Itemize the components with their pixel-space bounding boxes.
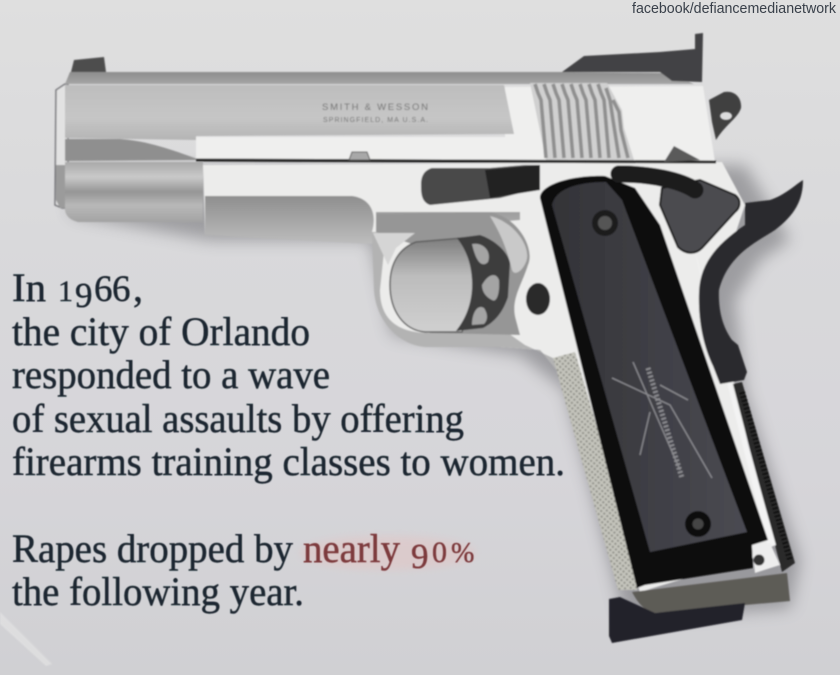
slide stop pin (485, 165, 540, 198)
slide serrations (535, 84, 628, 158)
line: the following year.: the following year. (12, 569, 304, 614)
grip screw upper (592, 210, 618, 236)
trigger guard web (373, 233, 415, 265)
barrel bushing (65, 139, 200, 161)
slide stop (421, 165, 540, 205)
slide top edge (65, 72, 694, 84)
thumb safety lever (619, 174, 695, 190)
pistol drop shadow (70, 165, 800, 620)
line: In 1966,: 6 (94, 269, 112, 310)
line: of sexual assaults by offering: of sexual assaults by offering (12, 396, 464, 441)
grip engraved lettering (648, 368, 682, 478)
background light streak (0, 612, 52, 666)
magazine well lip (632, 573, 790, 613)
line: In 1966,: , (133, 265, 143, 310)
line: Rapes dropped by nearly 90% (12, 526, 474, 576)
front strap stippling (553, 352, 640, 590)
Rapes dropped by: Rapes dropped by (12, 526, 293, 571)
line: responded to a wave: responded to a wave (12, 352, 330, 397)
trigger (456, 235, 510, 331)
nearly 90% highlight: 9 (411, 537, 428, 576)
line: In 1966,: In (12, 265, 46, 310)
trigger guard (372, 232, 558, 372)
muzzle (55, 84, 68, 208)
slide rail line (196, 160, 716, 162)
muzzle dark ring (56, 165, 66, 208)
grip screw upper ring (598, 216, 612, 230)
barrel (65, 162, 203, 222)
grip panel inner (552, 182, 747, 552)
slide rear (196, 86, 715, 162)
takedown notch (349, 152, 370, 160)
grip corner screw plate (752, 543, 780, 573)
nearly 90% highlight: % (451, 538, 474, 569)
engraving maker: SMITH & WESSON (322, 102, 428, 113)
lanyard loop (709, 92, 741, 140)
slide notch (664, 146, 700, 162)
highlight glow (300, 536, 476, 570)
nearly 90% highlight: 0 (432, 536, 447, 569)
magazine release (526, 283, 550, 315)
line: In 1966,: 6 (112, 269, 130, 310)
slide engraving (322, 102, 428, 124)
thumb safety plate (660, 180, 740, 253)
grip engraved logo (612, 362, 712, 478)
main text block (12, 265, 565, 614)
grip screw lower (685, 511, 711, 537)
line: firearms training classes to women.: firearms training classes to women. (12, 439, 565, 484)
slide side (65, 85, 514, 140)
trigger recess (376, 212, 530, 335)
line: the city of Orlando: the city of Orlando (12, 309, 310, 354)
trigger guard opening (390, 238, 478, 332)
pistol frame (203, 162, 772, 592)
watermark: facebook/defiancemedianetwork (632, 1, 837, 17)
nearly 90% highlight: nearly (303, 526, 400, 571)
line: In 1966,: 9 (75, 276, 92, 315)
front sight (71, 57, 106, 72)
serration field (530, 83, 634, 160)
backstrap serrations (733, 382, 795, 572)
backstrap teeth (742, 392, 790, 560)
grip screw lower ring (692, 518, 704, 530)
grip panel (540, 176, 768, 588)
trigger cut-outs (472, 244, 499, 325)
frame lower shading (205, 196, 520, 244)
frame right rail (692, 240, 776, 548)
rear sight (562, 33, 703, 82)
line: In 1966,: 1 (58, 275, 73, 308)
magazine base (609, 597, 745, 643)
trigger recess highlight (490, 216, 527, 273)
engraving city: SPRINGFIELD, MA U.S.A. (323, 117, 428, 124)
grip corner screw (754, 554, 764, 566)
hammer and grip safety (699, 180, 803, 384)
